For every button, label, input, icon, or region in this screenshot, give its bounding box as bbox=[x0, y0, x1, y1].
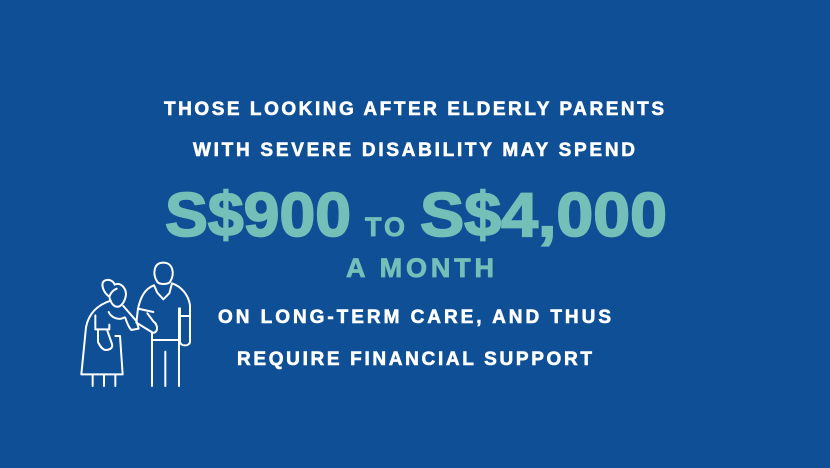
woman legs bbox=[93, 375, 115, 386]
heading line 2: WITH SEVERE DISABILITY MAY SPEND bbox=[193, 140, 635, 161]
amount: high figure: S$4,000 bbox=[420, 181, 667, 250]
amount period: a month: A MONTH bbox=[346, 253, 494, 283]
icon: carer supporting elderly woman bbox=[81, 263, 190, 386]
man head bbox=[154, 263, 173, 284]
closing line 2: REQUIRE FINANCIAL SUPPORT bbox=[237, 349, 592, 370]
amount connector: to: TO bbox=[365, 212, 405, 242]
man collar and shoulders bbox=[138, 283, 190, 345]
man legs bbox=[152, 308, 190, 386]
amount: low figure: S$900 bbox=[165, 181, 351, 250]
woman dress bbox=[81, 301, 139, 374]
woman arm and hand bbox=[95, 315, 112, 350]
man sleeve and forearm bbox=[136, 309, 157, 333]
woman hair and face bbox=[102, 280, 126, 307]
heading line 1: THOSE LOOKING AFTER ELDERLY PARENTS bbox=[164, 99, 664, 120]
closing line 1: ON LONG-TERM CARE, AND THUS bbox=[218, 307, 611, 328]
